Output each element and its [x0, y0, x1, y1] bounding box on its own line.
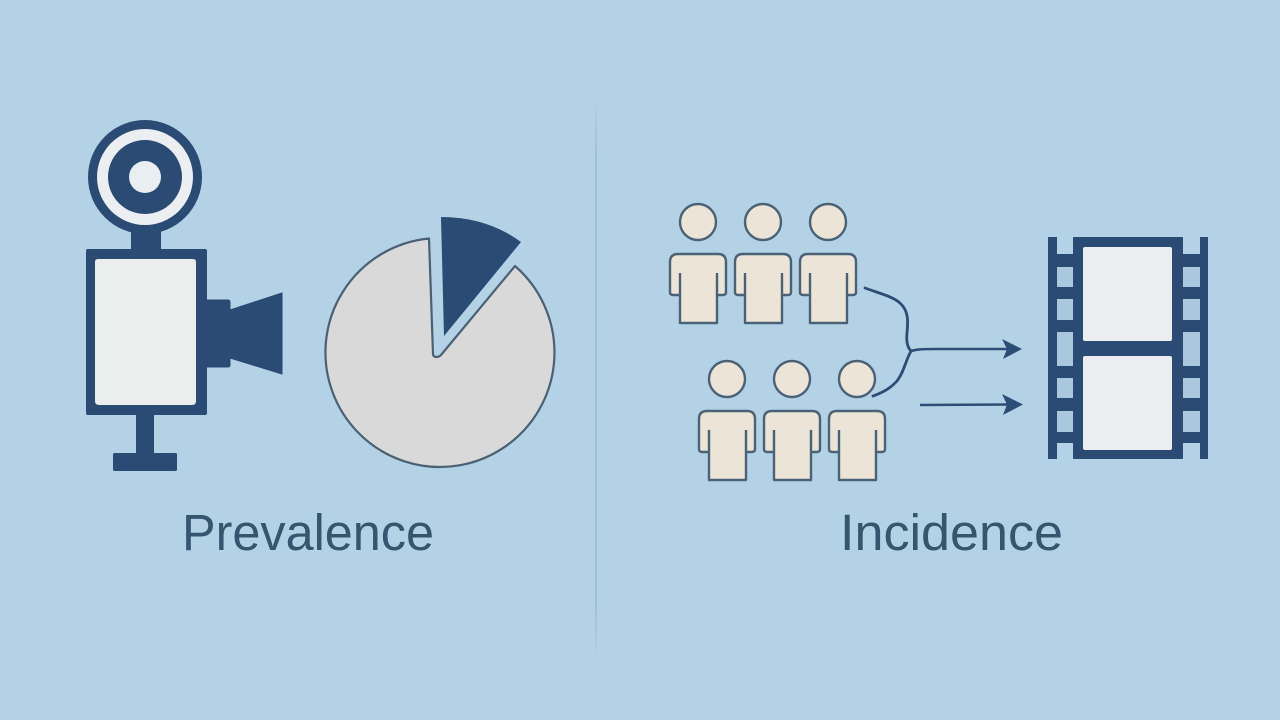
arrow: second flow [920, 394, 1023, 415]
chart: pie with separated slice [325, 217, 554, 467]
label: Prevalence: Prevalence [182, 504, 434, 561]
group: bottom row of people [699, 361, 885, 480]
panel: incidence [670, 204, 1208, 561]
label: Incidence: Incidence [840, 504, 1063, 561]
icon: film strip [1048, 237, 1208, 459]
panel: prevalence [86, 120, 554, 561]
arrow: merged flow from both groups [865, 288, 1022, 396]
center divider [595, 100, 597, 660]
icon: video camera [86, 120, 282, 471]
group: top row of people [670, 204, 856, 323]
